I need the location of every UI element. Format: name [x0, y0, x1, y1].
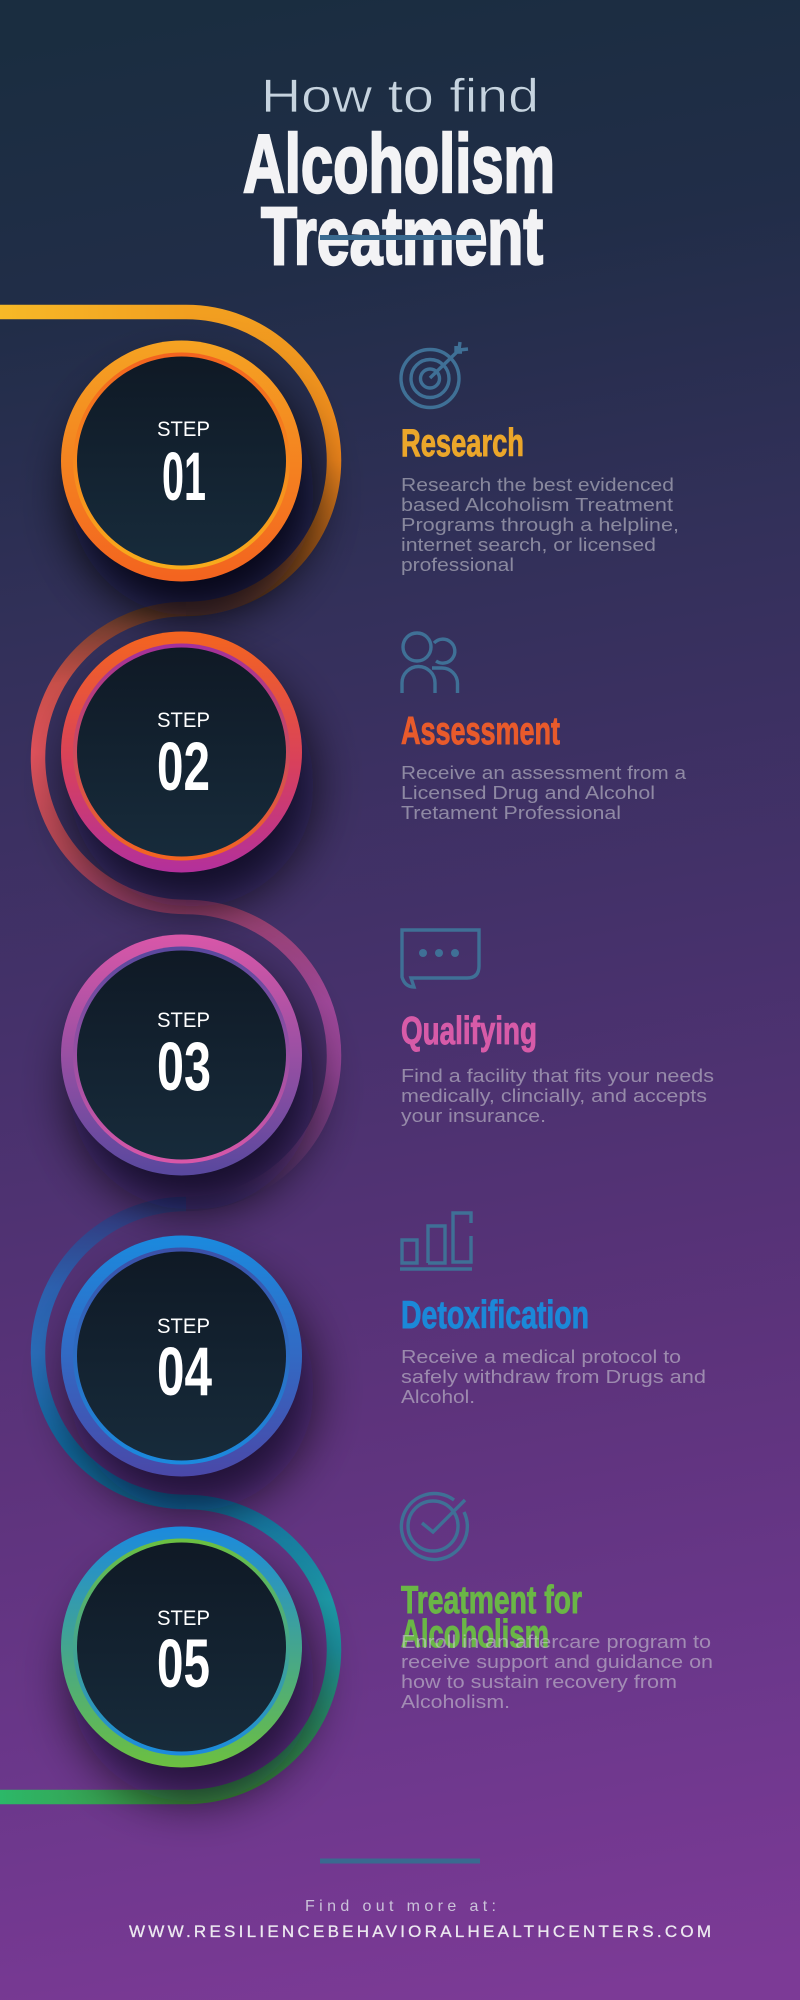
step 5 circle: 05 [157, 1625, 210, 1702]
icon: check mark [401, 1494, 467, 1560]
text: Research [401, 475, 679, 575]
text: Treatment for Alcoholism: Alcoholism. [401, 1692, 510, 1712]
text: Assessment: Licensed Drug and Alcohol [401, 783, 655, 803]
icon: target [401, 342, 468, 408]
text: Treatment for Alcoholism: receive support and guidance on [401, 1652, 713, 1672]
heading: Treatment for Alcoholism: Treatment for [401, 1579, 582, 1622]
heading: Research: Research [401, 422, 524, 465]
text: Treatment for Alcoholism: Enroll in an aftercare program to [401, 1632, 711, 1652]
heading: Assessment: Assessment [401, 710, 560, 753]
text: Detoxification [401, 1347, 706, 1407]
text: Qualifying: Find a facility that fits your needs [401, 1066, 714, 1086]
heading: Detoxification: Detoxification [401, 1294, 589, 1337]
text: Qualifying: your insurance. [401, 1106, 546, 1126]
text: Research: internet search, or licensed [401, 535, 656, 555]
heading: Qualifying: Qualifying [401, 1010, 537, 1053]
text: Qualifying: medically, clincially, and accepts [401, 1086, 707, 1106]
step 4 circle: STEP [157, 1315, 210, 1338]
icon: people [402, 633, 458, 693]
footer: Find out more at: [305, 1898, 496, 1915]
icon: chat bubble [402, 930, 479, 987]
heading: Treatment for Alcoholism [401, 1579, 582, 1656]
step 3 circle [61, 934, 314, 1210]
step 2 circle: STEP [157, 709, 210, 732]
step 4 circle: 04 [157, 1333, 212, 1410]
step 3 circle: STEP [157, 1009, 210, 1032]
icon: bar chart [400, 1213, 472, 1269]
step 2 circle: 02 [157, 728, 210, 805]
step 5 circle [61, 1526, 314, 1802]
step 1 circle [61, 340, 314, 616]
text: Qualifying [401, 1066, 714, 1126]
step 1 circle: STEP [157, 418, 210, 441]
title: Treatment [261, 191, 543, 282]
title: How to find [261, 69, 539, 122]
text: Assessment: Tretament Professional [401, 803, 621, 823]
step 3 circle: 03 [157, 1028, 211, 1105]
step 4 circle [61, 1236, 314, 1511]
footer: WWW.RESILIENCEBEHAVIORALHEALTHCENTERS.COM [129, 1922, 711, 1941]
text: Detoxification: safely withdraw from Drugs and [401, 1367, 706, 1387]
text: Assessment [401, 763, 687, 823]
text: Assessment: Receive an assessment from a [401, 763, 687, 783]
step 2 circle [61, 632, 314, 907]
text: Research: Research the best evidenced [401, 475, 674, 495]
footer [129, 1858, 711, 1941]
text: Research: professional [401, 555, 514, 575]
text: Research: Programs through a helpline, [401, 515, 679, 535]
connecting ribbon [0, 312, 334, 1797]
heading: Treatment for Alcoholism: Alcoholism [401, 1613, 549, 1656]
text: Treatment for Alcoholism: how to sustain recovery from [401, 1672, 677, 1692]
text: Detoxification: Alcohol. [401, 1387, 475, 1407]
title [243, 69, 555, 282]
title: Alcoholism [243, 117, 555, 210]
step 5 circle: STEP [157, 1607, 210, 1630]
text: Research: based Alcoholism Treatment [401, 495, 673, 515]
text: Detoxification: Receive a medical protocol to [401, 1347, 681, 1367]
text: Treatment for Alcoholism [401, 1632, 713, 1712]
step 1 circle: 01 [162, 438, 206, 515]
